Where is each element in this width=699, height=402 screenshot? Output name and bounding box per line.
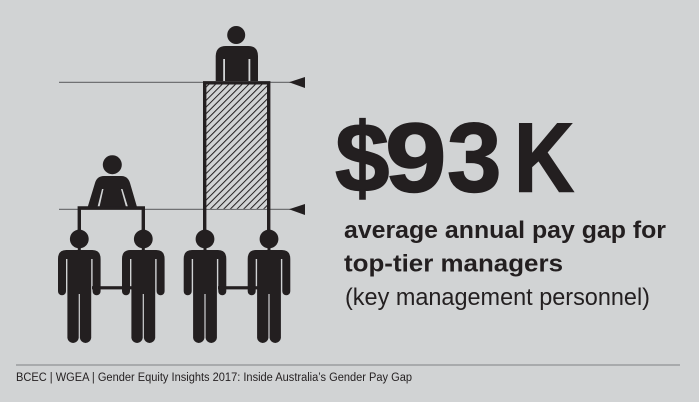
- headline figure: K: [514, 104, 574, 213]
- icon: lower-tier manager: [88, 155, 137, 207]
- headline figure: $: [335, 103, 390, 213]
- footer source: BCEC | WGEA | Gender Equity Insights 2017: Inside Australia’s Gender Pay Gap: [16, 372, 412, 384]
- bold description line 2: top-tier managers: [344, 250, 563, 278]
- icon: left person group: [58, 230, 165, 343]
- headline figure: [335, 103, 574, 213]
- bracket under lower-tier manager: [79, 208, 143, 232]
- headline figure: 3: [447, 103, 502, 213]
- description: [344, 217, 666, 311]
- regular description line: (key management personnel): [345, 284, 650, 311]
- icon: top-tier manager: [216, 26, 258, 81]
- upper reference line with arrow: [59, 77, 305, 88]
- footer rule: [16, 364, 680, 366]
- hatched gap column: [205, 83, 269, 232]
- bold description line 1: average annual pay gap for: [344, 217, 666, 244]
- lower reference line with arrow: [59, 204, 305, 215]
- icon: right person group: [184, 230, 290, 343]
- headline figure: 9: [385, 104, 447, 213]
- chart: pay gap hierarchy diagram: [58, 26, 305, 343]
